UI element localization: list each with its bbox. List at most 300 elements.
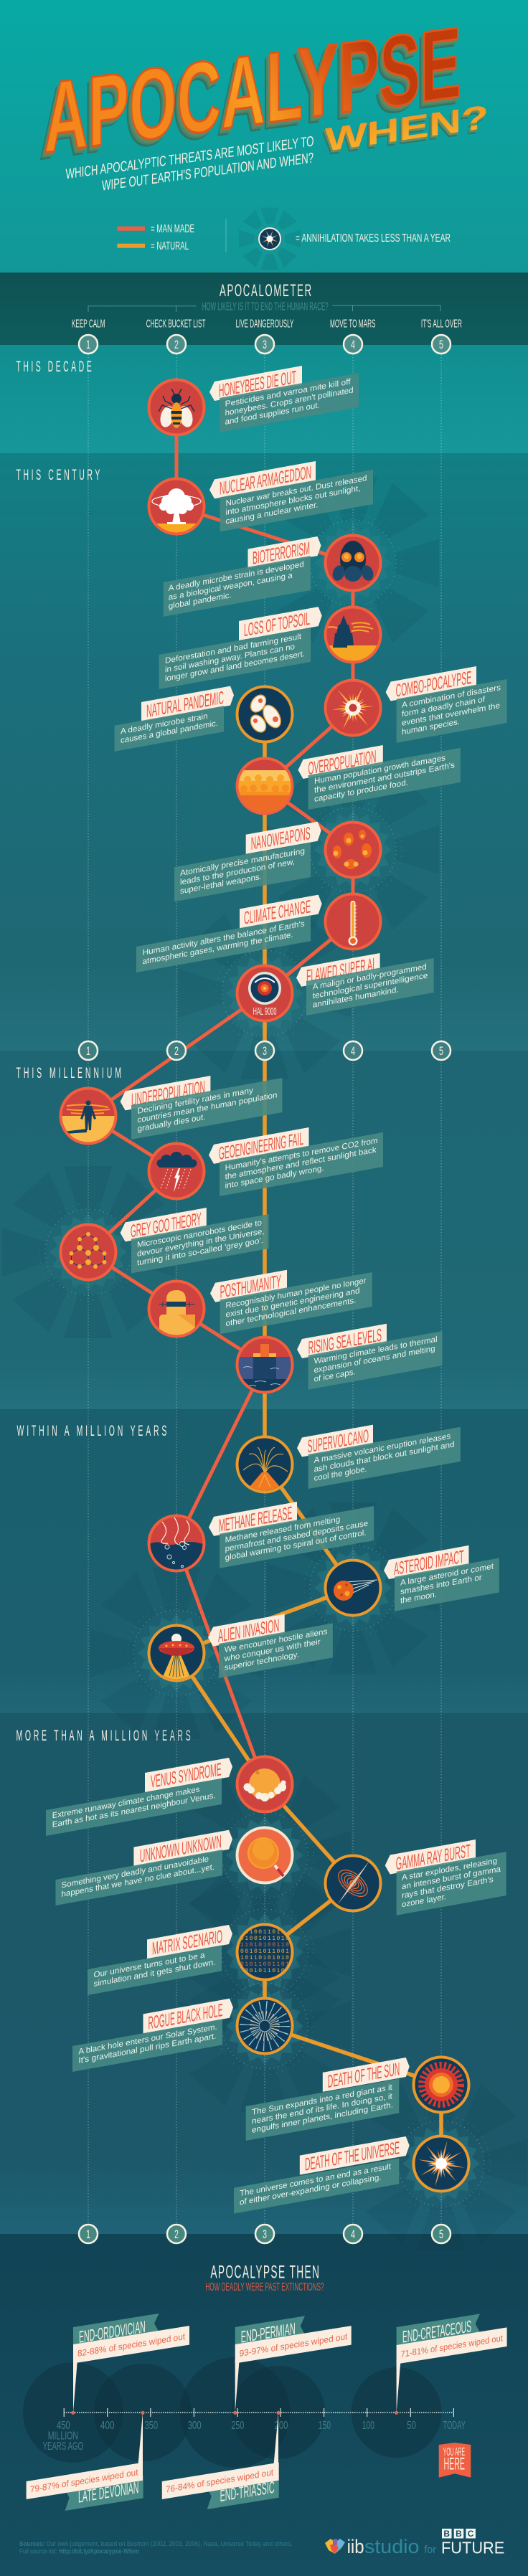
icon: bee: [149, 380, 204, 435]
text block: combo-pocalypse: form a deadly chain of: [402, 695, 486, 719]
heading: this decade: THIS DECADE: [16, 358, 92, 375]
text block: nanoweapons: Atomically precise manufacturing: [180, 847, 305, 878]
panel: nuclear armageddon: [148, 461, 373, 538]
legend: natural: [117, 240, 189, 252]
text block: nuclear: [220, 470, 373, 531]
banner: honeybees die out: [209, 366, 302, 403]
text block: rising sea levels: [308, 1331, 442, 1390]
text block: asteroid: smashes into Earth or: [400, 1573, 482, 1596]
flag: end-cretaceous: 71-81% of species wiped out: [401, 2333, 503, 2359]
banner: supervolcano: [297, 1425, 373, 1459]
banner: geoengineering fail: [209, 1127, 308, 1166]
logo: BBC Future: C: [468, 2529, 474, 2539]
text block: geoengineering: Humanity's attempts to remove CO2 from: [225, 1137, 378, 1173]
panel: death of the sun: [246, 2057, 469, 2141]
panel: supervolcano: SUPERVOLCANO: [308, 1426, 369, 1457]
flag: end-ordovician: END-ORDOVICIAN: [79, 2317, 146, 2347]
text block: climate change: [136, 915, 311, 972]
chart: axis labels: 250: [231, 2420, 244, 2432]
icon: lone figure: [60, 1089, 117, 1145]
panel: apocalometer header: [72, 281, 462, 331]
flag: late devonian: [27, 2412, 143, 2511]
icon: cyborg figure: [149, 1281, 204, 1339]
text block: black hole: [72, 2019, 222, 2072]
panel: overpopulation: [236, 745, 461, 817]
text block: flawed super AI: annihilates humankind.: [313, 985, 399, 1010]
heading: apocalypse then: APOCALYPSE THEN: [210, 2263, 319, 2283]
subtitle: WIPE OUT EARTH'S POPULATION AND WHEN?: [102, 150, 314, 194]
heading: this millennium: THIS MILLENNIUM: [16, 1064, 121, 1081]
sunbursts behind annihilation events: [2, 477, 527, 2250]
text block: matrix: Our universe turns out to be a: [93, 1951, 205, 1979]
panel: venus syndrome: [46, 1757, 293, 1836]
icon: storm cloud: [149, 1143, 204, 1199]
scale markers: bottom row: [79, 2225, 451, 2243]
title word: WHEN?: WHEN?: [323, 102, 486, 162]
text block: alien: [219, 1623, 333, 1678]
timeline line: natural threats: [176, 714, 441, 2164]
legend: man made: [117, 223, 194, 235]
text block: posthumanity: [220, 1272, 372, 1334]
panel: rogue black hole: ROGUE BLACK HOLE: [148, 2000, 222, 2034]
icon: binary rain: 0 1 0 1 1 0 0 1 1 0 1: [240, 1961, 289, 1968]
text block: grey goo: turning it into so-called 'grey goo'.: [137, 1236, 263, 1268]
panel: bioterrorism: [164, 535, 380, 617]
text block: natural pandemic: causes a global pandemic.: [121, 719, 218, 745]
text block: grey goo: Microscopic nanorobots decide to: [137, 1218, 262, 1250]
text block: posthumanity: other technological enhancements.: [226, 1297, 356, 1328]
banner: bioterrorism: [248, 536, 321, 569]
panel: bioterrorism: BIOTERRORISM: [253, 539, 310, 569]
panel: grey goo theory: [60, 1208, 269, 1279]
text block: grey goo: devour everything in the Universe,: [137, 1227, 264, 1259]
text block: overpopulation: the environment and outstrips Earth's: [314, 761, 455, 795]
logo: iibstudio: [325, 2536, 436, 2557]
chart: axis labels: 100: [362, 2420, 374, 2432]
text block: natural pandemic: A deadly microbe strain: [121, 712, 208, 737]
panel: matrix scenario: [88, 1924, 293, 1995]
text block: sun: The Sun expands into a red giant as it: [252, 2083, 393, 2117]
scale numbers: top row: 3: [263, 338, 267, 351]
icon: binary rain: 1 0 1 0 0 1 1 0 1 0 1: [240, 1929, 289, 1936]
subheading: past extinctions: HOW DEADLY WERE PAST EXTINCTIONS?: [205, 2281, 324, 2293]
text block: grey goo: [131, 1214, 269, 1274]
banner: grey goo theory: [121, 1208, 207, 1244]
flag: late devonian: 79-87% of species wiped out: [30, 2467, 138, 2495]
logo: BBC Future: FUTURE: [441, 2539, 504, 2557]
banner: rogue black hole: [143, 1998, 233, 2035]
scale numbers: middle row: 2: [174, 1044, 179, 1058]
scale numbers: bottom row: 2: [174, 2227, 179, 2241]
text block: rising sea levels: Warming climate leads to thermal: [314, 1335, 438, 1366]
text block: methane: Methane released from melting: [225, 1515, 340, 1545]
text block: venus: Earth as hot as its nearest neighbour Venus.: [52, 1791, 215, 1829]
text block: nanoweapons: super-lethal weapons.: [180, 873, 262, 896]
text block: matrix: simulation and it gets shut down.: [93, 1958, 215, 1989]
scale numbers: bottom row: [86, 2227, 443, 2241]
panel: methane release: METHANE RELEASE: [219, 1503, 292, 1536]
subtitle: WHICH APOCALYPTIC THREATS ARE MOST LIKELY TO: [66, 133, 314, 182]
text block: methane: global warming to spiral out of control.: [225, 1528, 367, 1563]
text block: unknown: happens that we have no clue about...yet.: [62, 1863, 214, 1899]
text block: nuclear: into atmosphere blocks out sunlight,: [226, 484, 360, 517]
panel: rising sea levels: [236, 1324, 442, 1395]
panel: death of the universe: [234, 2136, 469, 2214]
chart: axis labels: YEARS AGO: [43, 2440, 83, 2453]
text block: underpopulation: countries mean the human population: [138, 1091, 278, 1124]
legend: man made: = MAN MADE: [151, 223, 194, 235]
text block: sun: [246, 2079, 399, 2141]
text block: supervolcano: A massive volcanic eruption releases: [314, 1432, 451, 1465]
text block: honeybees: [220, 373, 359, 432]
panel: unknown unknown: UNKNOWN UNKNOWN: [140, 1832, 222, 1867]
chart: axis labels: [43, 2420, 466, 2453]
flag: end-ordovician: 82-88% of species wiped out: [77, 2331, 185, 2359]
text block: methane: permafrost and seabed deposits cause: [225, 1519, 368, 1553]
banner: overpopulation: [298, 745, 383, 781]
sources: [19, 2540, 293, 2556]
chart: axis labels: 300: [188, 2420, 202, 2432]
icon: hot planet: [237, 1757, 293, 1812]
text block: honeybees: Pesticides and varroa mite kill off: [225, 377, 351, 409]
title word: WHEN?: WHEN?: [324, 100, 487, 161]
text block: methane: [220, 1506, 374, 1568]
panel: underpopulation: UNDERPOPULATION: [131, 1077, 205, 1110]
panel: nanoweapons: [174, 821, 380, 901]
text block: venus: [46, 1779, 222, 1836]
flag: end-triassic: 76-84% of species wiped out: [166, 2467, 273, 2495]
scale numbers: top row: 5: [439, 338, 443, 351]
panel: rising sea levels: RISING SEA LEVELS: [308, 1325, 382, 1358]
text block: gamma: rays that destroy Earth's: [402, 1875, 494, 1900]
banner: nanoweapons: [246, 821, 321, 855]
banner: posthumanity: [210, 1270, 287, 1304]
text block: alien: who conquer us with their: [224, 1638, 321, 1664]
panel: venus syndrome: VENUS SYNDROME: [151, 1759, 222, 1792]
logo: BBC Future: B: [443, 2529, 450, 2539]
text block: nuclear: causing a nuclear winter.: [226, 501, 319, 526]
icon: black hole: [237, 1998, 293, 2054]
timeline line: man-made threats: [88, 407, 353, 1784]
text block: bioterrorism: A deadly microbe strain is developed: [169, 560, 304, 593]
panel: honeybees die out: HONEYBEES DIE OUT: [219, 367, 296, 401]
icon: red giant sun: [413, 2057, 469, 2113]
panel: asteroid impact: [326, 1545, 499, 1615]
text block: nanoweapons: leads to the production of new,: [180, 858, 295, 887]
heading: within a million years: WITHIN A MILLION YEARS: [17, 1422, 166, 1439]
icon: nanobots: [326, 822, 380, 878]
text block: climate change: Human activity alters the balance of Earth's: [143, 919, 305, 957]
text block: combo-pocalypse: human species.: [402, 718, 460, 737]
panel: loss of topsoil: LOSS OF TOPSOIL: [244, 609, 310, 640]
icon: binary rain: 1 1 0 1 0 1 0 0 1 1 0: [240, 1942, 289, 1948]
banner: methane release: [209, 1502, 297, 1538]
scale markers: middle row: [79, 1041, 451, 1060]
icon: gas mask: [326, 535, 380, 591]
text block: flawed super AI: technological superintelligence: [313, 972, 428, 1000]
scale labels: IT'S ALL OVER: [421, 318, 462, 331]
panel: grey goo theory: GREY GOO THEORY: [131, 1209, 202, 1242]
text block: matrix: [88, 1945, 222, 1995]
text block: supervolcano: ash clouds that block out sunlight and: [314, 1440, 455, 1474]
panel: apocalometer header: HOW LIKELY IS IT TO END THE HUMAN RACE?: [202, 301, 329, 313]
text block: sun: engulfs inner planets, including Earth.: [252, 2101, 393, 2135]
text block: underpopulation: [131, 1078, 282, 1140]
banner: flawed super AI: [296, 953, 380, 988]
text block: combo-pocalypse: events that overwhelm the: [402, 701, 500, 728]
title word: WHEN?: [323, 98, 489, 162]
panel: death of the universe: DEATH OF THE UNIVERSE: [305, 2138, 400, 2175]
panel: posthumanity: [149, 1270, 372, 1339]
text block: underpopulation: gradually dies out.: [138, 1113, 206, 1134]
logo: iibstudio: for: [425, 2544, 436, 2556]
text block: gamma: ozone layer.: [402, 1893, 446, 1909]
panel: matrix scenario: MATRIX SCENARIO: [152, 1926, 222, 1959]
text block: nanoweapons: [174, 843, 311, 901]
flag: end-permian: [235, 2316, 352, 2412]
scale numbers: middle row: 5: [439, 1044, 443, 1058]
icon: HAL 9000 eye: [237, 965, 293, 1021]
panel: geoengineering fail: [149, 1127, 383, 1199]
panel: apocalypse then: [23, 2263, 507, 2511]
banner: asteroid impact: [384, 1545, 469, 1581]
panel: overpopulation: OVERPOPULATION: [308, 747, 376, 779]
icon: asteroid: [326, 1561, 380, 1615]
text block: overpopulation: capacity to produce food.: [314, 778, 408, 804]
icon: spiral with beam: [326, 1856, 380, 1910]
badge: you are here: [439, 2443, 471, 2478]
text block: overpopulation: [308, 748, 461, 810]
text block: flawed super AI: A malign or badly-programmed: [313, 962, 427, 992]
icon: crowd: [236, 759, 293, 817]
flag: end-triassic: [162, 2412, 279, 2509]
banner: climate change: [240, 894, 322, 929]
text block: flawed super AI: [306, 958, 434, 1015]
panel: honeybees die out: [149, 366, 359, 435]
text block: topsoil: in soil washing away. Plants can no: [165, 643, 295, 674]
logo: iibstudio: iib: [347, 2536, 364, 2557]
scale numbers: top row: 4: [351, 338, 355, 351]
text block: topsoil: Deforestation and bad farming result: [165, 633, 302, 666]
flag: end-cretaceous: [397, 2314, 507, 2412]
chart: extinction circles: [23, 2357, 442, 2468]
text block: geoengineering: into space go badly wrong.: [225, 1164, 324, 1190]
logo: BBC Future: B: [456, 2529, 462, 2539]
icon: binary rain: 1 0 0 1 0 1 1 0 1 0 1: [240, 1968, 289, 1974]
panel: gamma ray burst: [326, 1839, 506, 1916]
text block: asteroid: [395, 1558, 499, 1611]
title word: WHEN?: WHEN?: [325, 98, 489, 158]
section headings: [16, 358, 191, 1744]
panel: posthumanity: POSTHUMANITY: [220, 1272, 281, 1302]
panel: rogue black hole: [72, 1998, 293, 2072]
subtitle: [66, 133, 314, 199]
scale labels: [72, 318, 462, 331]
chart: axis labels: 350: [144, 2420, 158, 2432]
text block: alien: We encounter hostile aliens: [225, 1627, 328, 1654]
banner: combo-pocalypse: [386, 666, 476, 703]
icon: flooded city: [236, 1337, 293, 1395]
scale numbers: middle row: [86, 1044, 443, 1058]
icon: molecule lattice: [60, 1225, 116, 1279]
panel: alien invasion: ALIEN INVASION: [218, 1616, 279, 1647]
panel: underpopulation: [60, 1076, 282, 1145]
text block: alien: superior technology.: [225, 1650, 299, 1672]
chart: axis labels: 400: [100, 2420, 115, 2432]
heading: this century: THIS CENTURY: [16, 466, 100, 483]
logo: iibstudio: studio: [364, 2536, 419, 2557]
text block: universe: of either over-expanding or collapsing.: [240, 2173, 382, 2207]
panel: death of the sun: DEATH OF THE SUN: [328, 2059, 400, 2092]
text block: gamma: [397, 1852, 506, 1916]
panel: loss of topsoil: [159, 606, 382, 689]
panel: nanoweapons: NANOWEAPONS: [251, 823, 311, 854]
text block: unknown: [56, 1850, 222, 1905]
panel: natural pandemic: NATURAL PANDEMIC: [146, 688, 224, 721]
scale numbers: bottom row: 4: [351, 2227, 355, 2241]
text block: venus: Extreme runaway climate change makes: [52, 1785, 200, 1820]
scale numbers: top row: [86, 338, 443, 351]
panel: unknown unknown: [56, 1827, 293, 1905]
legend: natural: = NATURAL: [151, 240, 189, 252]
flag: end-ordovician: [73, 2314, 189, 2412]
banner: death of the sun: [323, 2057, 410, 2093]
text block: gamma: an intense burst of gamma: [402, 1865, 501, 1891]
icon: annihilation burst: [239, 208, 301, 270]
scale numbers: top row: 1: [86, 338, 90, 351]
text block: geoengineering: the atmosphere and reflect sunlight back: [225, 1146, 377, 1182]
banner: natural pandemic: [141, 686, 234, 722]
scale labels: CHECK BUCKET LIST: [146, 318, 206, 331]
chart: axis labels: 200: [275, 2420, 288, 2432]
banner: underpopulation: [121, 1076, 210, 1112]
chart: timeline axis: [64, 2408, 453, 2417]
scale markers: top row: [79, 335, 451, 354]
text block: bioterrorism: [164, 556, 311, 617]
legend: [117, 208, 451, 270]
banner: loss of topsoil: [239, 606, 322, 641]
icon: starburst: [326, 680, 380, 736]
icon: thermometer: [326, 894, 380, 950]
text block: natural pandemic: [115, 706, 224, 752]
text block: posthumanity: exist due to genetic engineering and: [226, 1287, 359, 1320]
text block: supervolcano: cool the globe.: [314, 1465, 367, 1483]
icon: final explosion: [413, 2136, 469, 2192]
sources: Full source list: http://bit.ly/Apocalypse-When: [19, 2548, 139, 2556]
text block: asteroid: A large asteroid or comet: [400, 1562, 494, 1588]
panel: geoengineering fail: GEOENGINEERING FAIL: [219, 1129, 303, 1164]
chart: axis labels: 150: [319, 2420, 331, 2432]
sources: Sources: Our own judgement, based on Bostrom (2002, 2003, 2006), Nasa, Universe Today and others.: [19, 2540, 293, 2548]
panel: methane release: [148, 1502, 374, 1572]
banner: rising sea levels: [297, 1324, 387, 1360]
panel: supervolcano: [237, 1425, 461, 1492]
text block: black hole: A black hole enters our Solar System.: [78, 2023, 217, 2056]
text block: posthumanity: Recognisably human people no longer: [226, 1277, 367, 1310]
banner: unknown unknown: [133, 1829, 232, 1867]
text block: black hole: It's gravitational pull rips Earth apart.: [78, 2032, 216, 2065]
icon: HAL 9000 eye: HAL 9000: [253, 1005, 277, 1018]
chart: axis labels: TODAY: [443, 2420, 466, 2432]
icon: methane bubbles: [148, 1516, 205, 1572]
panel: flawed super AI: [237, 953, 434, 1021]
text block: sun: nears the end of its life. In doing so, it: [252, 2092, 393, 2126]
banner: matrix scenario: [147, 1924, 232, 1960]
title: [39, 6, 489, 199]
heading: more than a million years: MORE THAN A MILLION YEARS: [16, 1727, 191, 1744]
text block: unknown: Something very deadly and unavoidable: [62, 1855, 209, 1890]
badge: you are here: HERE: [443, 2455, 465, 2474]
scale labels: MOVE TO MARS: [330, 318, 376, 331]
flag: end-permian: 93-97% of species wiped out: [240, 2331, 348, 2359]
icon: mushroom cloud: [148, 479, 205, 538]
text block: rising sea levels: of ice caps.: [314, 1368, 356, 1384]
banner: venus syndrome: [145, 1757, 232, 1793]
text block: honeybees: honeybees. Crops aren't pollinated: [225, 386, 354, 418]
panel: apocalypse then: LATE DEVONIAN: [78, 2478, 138, 2506]
text block: honeybees: and food supplies run out.: [225, 401, 320, 427]
panel: combo-pocalypse: [326, 666, 507, 743]
scale labels: LIVE DANGEROUSLY: [236, 318, 294, 331]
scale numbers: top row: 2: [174, 338, 179, 351]
icon: magnifying glass: [237, 1827, 293, 1883]
scale numbers: bottom row: 3: [263, 2227, 267, 2241]
icon: flying saucer: [149, 1625, 204, 1682]
panel: climate change: CLIMATE CHANGE: [244, 896, 311, 929]
logo: BBC Future: [441, 2529, 504, 2557]
banner: nuclear armageddon: [209, 461, 316, 501]
legend: annihilation text: = ANNIHILATION TAKES LESS THAN A YEAR: [296, 232, 451, 245]
text block: bioterrorism: global pandemic.: [169, 591, 232, 611]
scale numbers: bottom row: 1: [86, 2227, 90, 2241]
panel: alien invasion: [149, 1614, 333, 1682]
heading: apocalometer: APOCALOMETER: [220, 281, 311, 300]
text block: climate change: atmospheric gases, warming the climate.: [143, 931, 293, 966]
chart: axis labels: 50: [407, 2420, 416, 2432]
text block: gamma: A star explodes, releasing: [402, 1857, 497, 1883]
text block: topsoil: [159, 628, 311, 689]
chart: axis labels: 450: [57, 2420, 70, 2432]
chart: axis labels: MILLION: [48, 2430, 78, 2443]
banner: alien invasion: [208, 1614, 285, 1648]
text block: universe: The universe comes to an end as a result: [240, 2162, 392, 2198]
badge: you are here: YOU ARE: [443, 2446, 465, 2458]
text block: rising sea levels: expansion of oceans and melting: [314, 1345, 435, 1375]
text block: universe: [234, 2158, 399, 2214]
text block: combo-pocalypse: A combination of disasters: [402, 683, 501, 710]
scale labels: KEEP CALM: [72, 318, 105, 331]
icon: binary rain: 1 0 1 1 0 1 0 1 0 1 0: [240, 1955, 289, 1961]
text block: overpopulation: Human population growth damages: [314, 754, 446, 786]
scale numbers: middle row: 3: [263, 1044, 267, 1058]
icon: binary rain: 0 1 0 0 1 0 1 1 0 1 0: [240, 1936, 289, 1942]
scale numbers: middle row: 1: [86, 1044, 90, 1058]
text block: geoengineering: [220, 1132, 383, 1196]
icon: binary rain: 0 0 1 0 1 0 1 1 0 0 1: [240, 1948, 289, 1955]
scale numbers: middle row: 4: [351, 1044, 355, 1058]
panel: natural pandemic: [115, 686, 293, 752]
text block: combo-pocalypse: [397, 679, 507, 743]
text block: bioterrorism: as a biological weapon, causing a: [169, 571, 293, 602]
text block: supervolcano: [308, 1427, 461, 1489]
panel: nuclear armageddon: NUCLEAR ARMAGEDDON: [220, 463, 311, 499]
text block: underpopulation: Declining fertility rates in many: [138, 1086, 253, 1116]
text block: topsoil: longer grow and land becomes desert.: [165, 650, 305, 683]
icon: volcano: [237, 1437, 293, 1492]
icon: tree and dry ground: [324, 607, 382, 667]
flag: end-permian: END-PERMIAN: [241, 2319, 296, 2347]
banner: gamma ray burst: [385, 1839, 476, 1876]
